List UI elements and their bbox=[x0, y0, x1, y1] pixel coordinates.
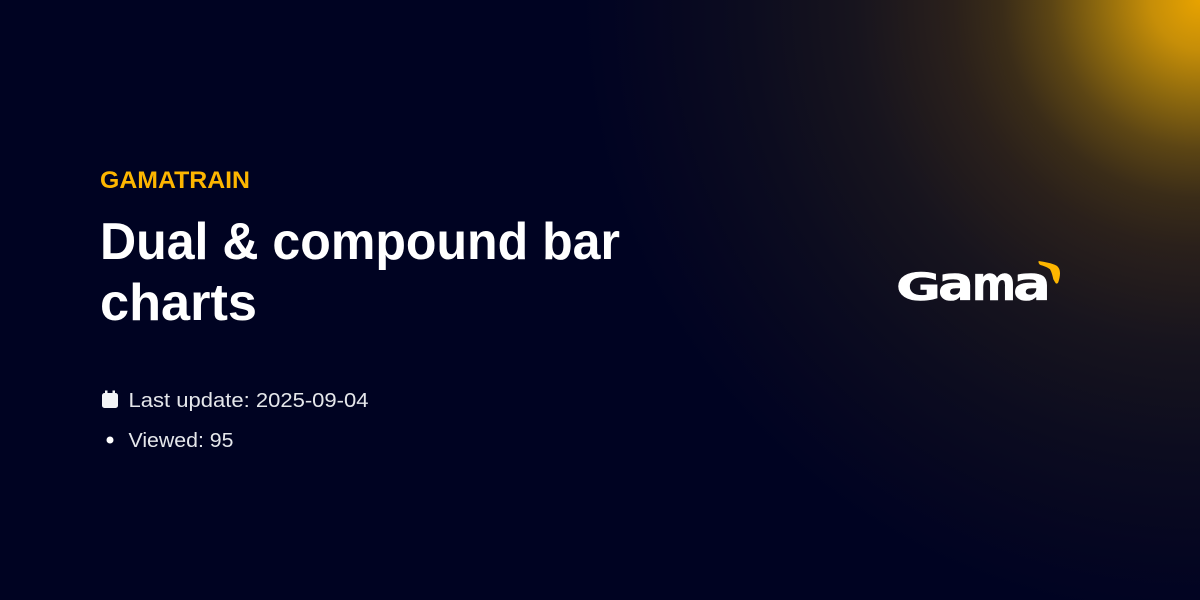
logo wordmark: a bbox=[1013, 257, 1051, 312]
logo wordmark: a bbox=[938, 257, 974, 312]
eyebrow: GAMATRAIN: GAMATRAIN bbox=[100, 167, 250, 194]
meta: last update bbox=[102, 390, 368, 412]
meta: views bbox=[106, 430, 234, 452]
title: charts bbox=[100, 274, 257, 332]
logo wordmark bbox=[896, 257, 1051, 312]
title bbox=[100, 213, 620, 332]
logo accent bbox=[1039, 261, 1060, 284]
logo wordmark: G bbox=[896, 266, 941, 309]
icon: calendar bbox=[102, 390, 118, 408]
logo wordmark: m bbox=[972, 257, 1016, 312]
icon: bullet bbox=[106, 436, 114, 444]
title: Dual & compound bar bbox=[100, 213, 620, 271]
text: viewed count: Viewed: 95 bbox=[128, 430, 234, 452]
text: last update date: Last update: 2025-09-04 bbox=[128, 390, 368, 412]
logo: Gama bbox=[896, 257, 1060, 312]
